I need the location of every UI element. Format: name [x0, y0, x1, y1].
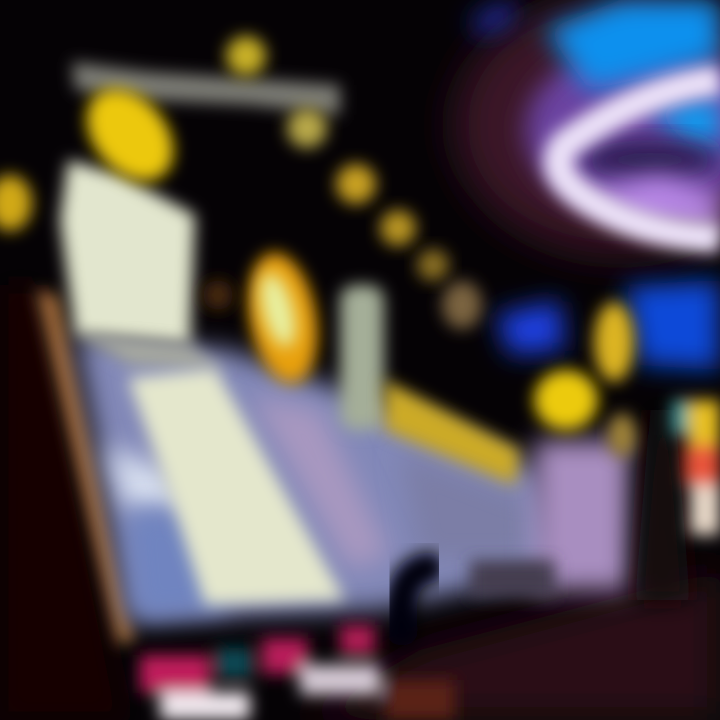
panel: blue band right [495, 280, 720, 370]
panel: dark left wedge [0, 285, 125, 720]
icon: top yellow dot [226, 36, 266, 76]
icon: yellow oval right [594, 302, 634, 382]
panel: dark centre of ring [580, 140, 720, 180]
panel: lavender blue screen [75, 335, 560, 620]
icon: yellow pale dot [287, 108, 327, 148]
panel: lower right dark floor [300, 570, 720, 720]
icon: small amber dot [203, 280, 233, 310]
panel: pale left patch [105, 445, 190, 510]
panel: pink lavender column [535, 440, 630, 590]
icon: amber small right [608, 413, 636, 457]
icon: yellow round right [534, 370, 598, 430]
title: pale grey heading band [72, 62, 340, 115]
panel: screen frame edge [36, 290, 135, 645]
panel: cream lower block [128, 368, 345, 605]
panel: dark lower centre text [470, 560, 555, 598]
panel: bottom colored strip [140, 625, 455, 720]
panel: grey band [80, 335, 225, 370]
icon: large yellow shape [69, 72, 191, 198]
panel: bright white ring [558, 80, 720, 238]
panel: muted centre right screen [400, 450, 530, 560]
panel: purple ring outer [455, 0, 720, 255]
panel: dark vertical pillar [635, 410, 690, 600]
icon: yellow dot [336, 164, 376, 204]
panel: light lavender right stripes [250, 395, 390, 570]
icon: orange yellow oval [239, 247, 327, 389]
icon: dark curved mark [401, 568, 428, 630]
icon: yellow dot [380, 210, 416, 246]
icon: pale green column [340, 285, 384, 430]
panel: blue top disc [470, 0, 720, 150]
icon: yellow slanted bar [385, 380, 520, 485]
panel: deeper blue lower left [125, 510, 230, 620]
panel: lilac lower ring fill [590, 175, 720, 230]
icon: bright yellow oval core [254, 269, 302, 351]
icon: left edge yellow dot [0, 175, 32, 231]
icon: dim tan blob [442, 281, 482, 329]
icon: yellow dim dot [417, 249, 449, 281]
panel: right red yellow gauge [672, 400, 720, 535]
panel: violet inner ring [525, 45, 720, 215]
panel: cream upper block [60, 160, 195, 345]
